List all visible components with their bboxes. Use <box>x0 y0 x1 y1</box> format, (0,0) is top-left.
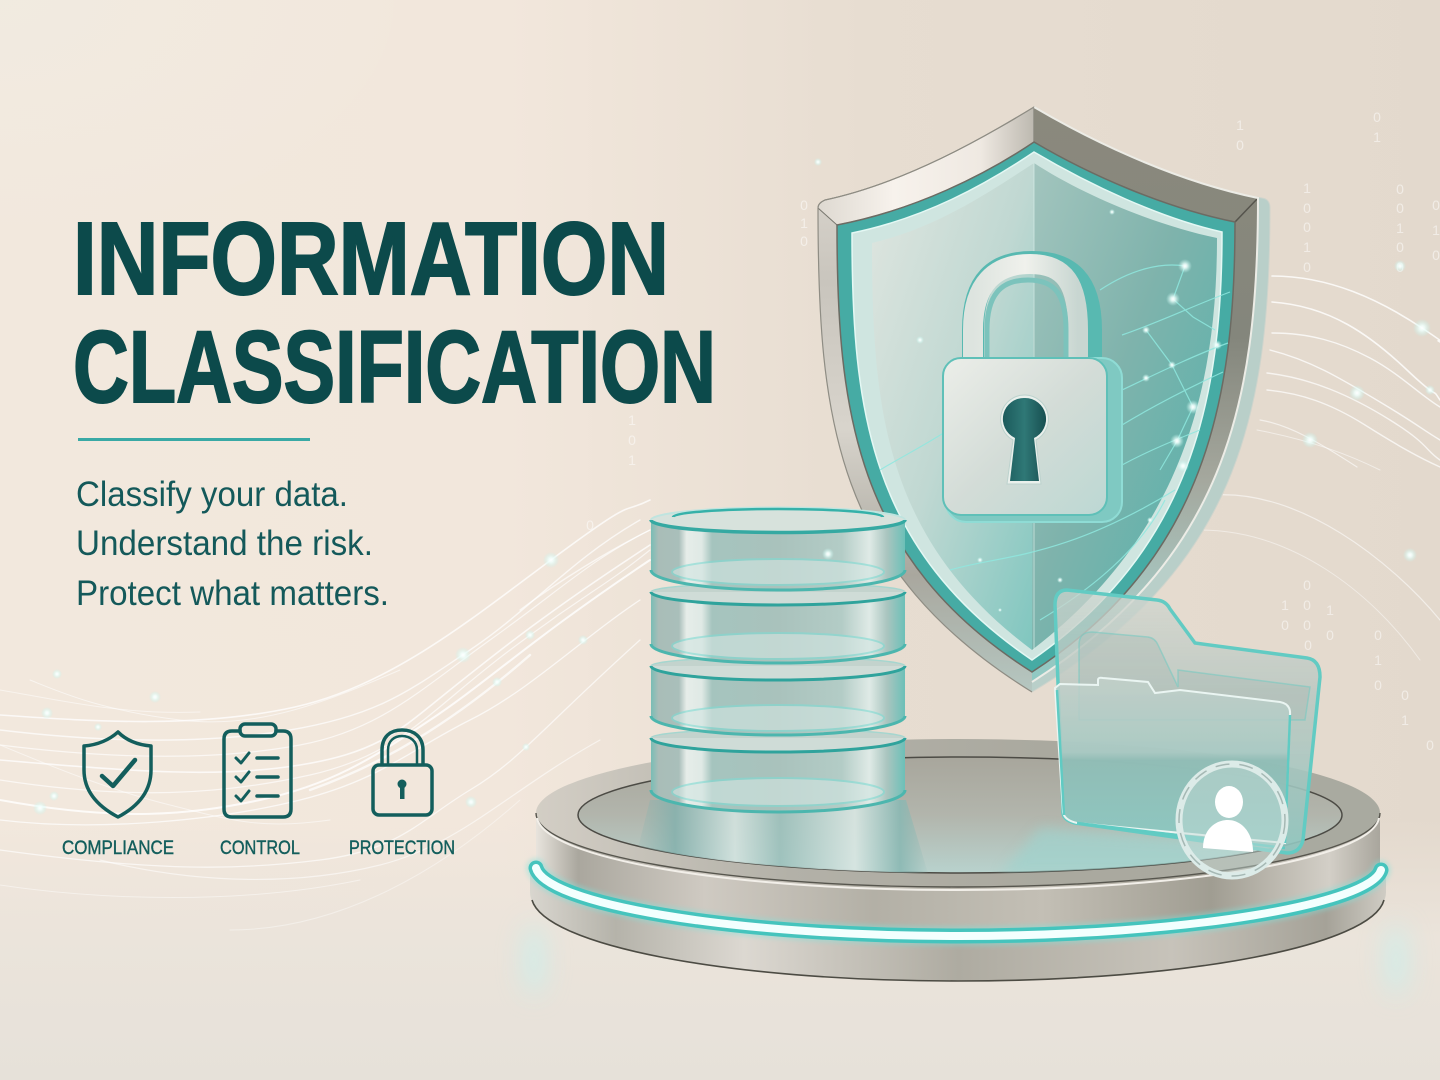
binary digit streams: 1 <box>1303 180 1311 196</box>
title: CLASSIFICATION <box>73 310 716 424</box>
binary digit streams: 1 <box>1326 602 1334 618</box>
binary digit streams: 0 <box>1303 577 1311 593</box>
data wave lines right <box>1200 276 1440 660</box>
binary digit streams: 0 <box>1303 200 1311 216</box>
binary digit streams: 0 <box>1396 181 1404 197</box>
binary digit streams: 1 <box>800 215 808 231</box>
shield outer glass edge <box>818 107 1270 692</box>
binary digit streams: 0 <box>1426 737 1434 753</box>
icon: protection lock <box>373 730 432 815</box>
binary digit streams: 1 <box>628 412 636 428</box>
binary digit streams: 0 <box>1303 219 1311 235</box>
binary digit streams: 0 <box>1303 259 1311 275</box>
binary digit streams <box>586 109 1440 753</box>
folder back panel <box>1055 590 1320 853</box>
disc 3 <box>651 657 905 735</box>
tagline: Classify your data. <box>76 475 348 514</box>
binary digit streams: 0 <box>1396 259 1404 275</box>
title <box>73 201 716 424</box>
label: control: CONTROL <box>220 838 300 859</box>
binary digit streams: 0 <box>1303 597 1311 613</box>
binary digit streams: 0 <box>1304 637 1312 653</box>
binary digit streams: 1 <box>1374 652 1382 668</box>
platform lower tier <box>530 870 1386 981</box>
binary digit streams: 0 <box>1373 109 1381 125</box>
shield sparkles <box>916 209 1222 612</box>
data wave lines left <box>0 500 650 930</box>
disc 4 <box>651 729 905 812</box>
shield bevel <box>852 152 1222 660</box>
shield circuit lines <box>880 265 1230 620</box>
binary digit streams: 1 <box>1401 712 1409 728</box>
tagline: Understand the risk. <box>76 524 373 563</box>
label: compliance: COMPLIANCE <box>62 838 174 859</box>
padlock body <box>943 358 1122 522</box>
shield glass panel <box>872 163 1217 650</box>
binary digit streams: 0 <box>628 432 636 448</box>
binary digit streams: 0 <box>1396 239 1404 255</box>
binary digit streams: 0 <box>1396 200 1404 216</box>
platform reflection glow <box>522 924 1408 996</box>
folder middle panel <box>1079 632 1310 720</box>
platform <box>522 739 1408 996</box>
binary digit streams: 1 <box>628 452 636 468</box>
platform upper tier <box>536 813 1380 936</box>
padlock keyhole <box>1001 395 1048 484</box>
icon: control clipboard <box>224 724 291 817</box>
person badge <box>1179 764 1285 876</box>
binary digit streams: 1 <box>1236 117 1244 133</box>
platform top surface <box>536 739 1380 890</box>
shield metal frame <box>818 107 1258 692</box>
divider <box>78 438 310 441</box>
padlock shackle <box>973 262 1091 362</box>
disc 1 <box>651 508 905 590</box>
binary digit streams: 0 <box>800 233 808 249</box>
folder front panel <box>1055 678 1290 843</box>
binary digit streams: 0 <box>586 517 594 533</box>
binary digit streams: 0 <box>1326 627 1334 643</box>
tagline <box>76 475 389 613</box>
binary digit streams: 0 <box>1432 197 1440 213</box>
folder <box>1055 590 1320 876</box>
shield teal inner rim <box>837 142 1235 672</box>
glowing particles <box>33 158 1435 815</box>
binary digit streams: 0 <box>1281 617 1289 633</box>
binary digit streams: 1 <box>1396 220 1404 236</box>
binary digit streams: 0 <box>1374 627 1382 643</box>
shield <box>818 107 1270 692</box>
binary digit streams: 0 <box>1303 617 1311 633</box>
platform glow ring <box>536 868 1381 936</box>
binary digit streams: 1 <box>1432 222 1440 238</box>
title: INFORMATION <box>73 201 669 316</box>
binary digit streams: 0 <box>800 197 808 213</box>
binary digit streams: 1 <box>1373 129 1381 145</box>
binary digit streams: 0 <box>1374 677 1382 693</box>
binary digit streams: 1 <box>1303 239 1311 255</box>
database cylinder <box>651 508 905 812</box>
tagline: Protect what matters. <box>76 574 389 613</box>
icon: compliance shield <box>84 732 151 817</box>
disc 2 <box>651 583 905 663</box>
binary digit streams: 1 <box>1281 597 1289 613</box>
binary digit streams: 0 <box>1236 137 1244 153</box>
label: protection: PROTECTION <box>349 838 455 859</box>
binary digit streams: 0 <box>1401 687 1409 703</box>
binary digit streams: 0 <box>1432 247 1440 263</box>
